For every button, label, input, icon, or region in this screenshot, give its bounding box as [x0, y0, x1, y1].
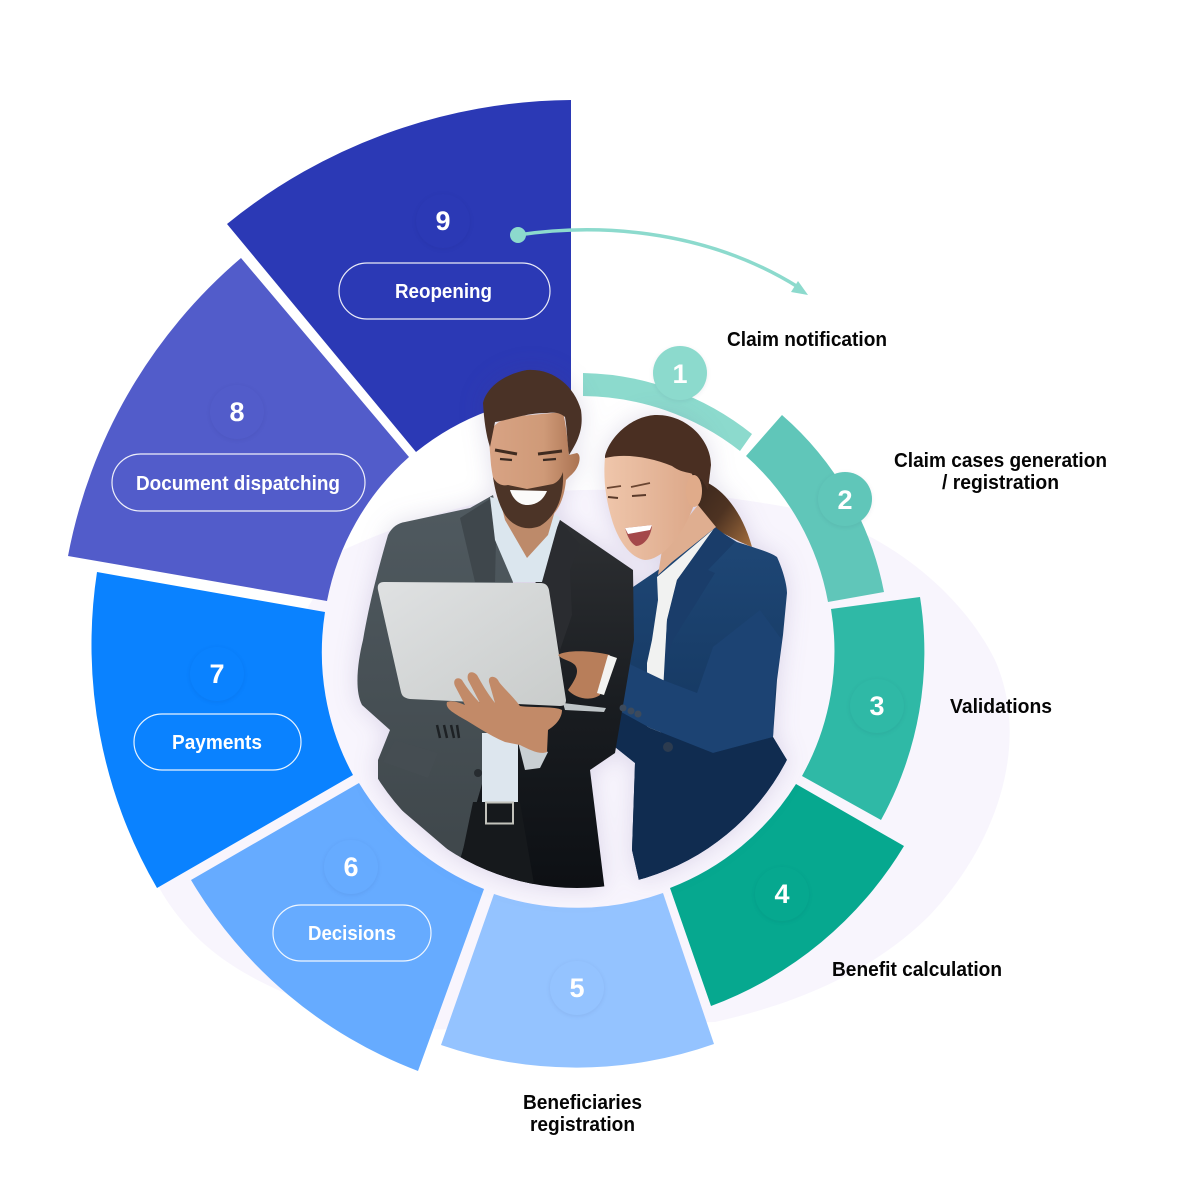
pill: Decisions	[273, 905, 431, 961]
laptop	[378, 582, 606, 712]
badge 6: 6	[343, 852, 359, 882]
badge 8: 8	[229, 397, 245, 427]
segment 7: payments	[91, 572, 353, 888]
segment 3: validations	[802, 597, 924, 820]
label: Claim cases generation / registration: / registration	[942, 472, 1059, 494]
label: Benefit calculation: Benefit calculation	[832, 959, 1002, 981]
badge 7: 7	[209, 659, 225, 689]
label: Validations: Validations	[950, 696, 1052, 718]
pill: Document dispatching	[112, 454, 365, 511]
pill: Decisions: Decisions	[308, 923, 396, 945]
label: Claim notification: Claim notification	[727, 329, 887, 351]
badge 3	[850, 679, 904, 733]
pill: Reopening	[339, 263, 550, 319]
badge 5: 5	[569, 973, 585, 1003]
badge 5	[550, 961, 604, 1015]
woman	[600, 415, 790, 900]
label: Beneficiaries registration: Beneficiaries	[523, 1092, 642, 1114]
segment 5: beneficiaries registration	[441, 893, 714, 1068]
pill: Reopening: Reopening	[395, 281, 492, 303]
background lavender blob	[150, 490, 1010, 1030]
hands	[447, 651, 673, 753]
badge 3: 3	[869, 691, 885, 721]
label: Beneficiaries registration: registration	[530, 1114, 635, 1136]
segment 8: document dispatching	[68, 258, 409, 601]
pill: Document dispatching: Document dispatching	[136, 473, 340, 495]
man: head	[483, 370, 582, 528]
segment 4: benefit calculation	[670, 784, 904, 1006]
photo: two business people with laptop	[357, 370, 790, 900]
badge 9: 9	[435, 206, 451, 236]
badge 4	[755, 867, 809, 921]
badge 8	[210, 385, 264, 439]
badge 4: 4	[774, 879, 790, 909]
badge 2: 2	[837, 485, 853, 515]
badge 7	[190, 647, 244, 701]
man: jacket and shirt	[357, 470, 634, 900]
badge 1	[653, 346, 707, 400]
segment 6: decisions	[191, 783, 484, 1071]
badge 2	[818, 472, 872, 526]
pill: Payments: Payments	[172, 732, 262, 754]
badge 1: 1	[672, 359, 688, 389]
badge 9	[416, 194, 470, 248]
label: Claim cases generation / registration	[894, 450, 1107, 494]
pill: Payments	[134, 714, 301, 770]
arrow from reopening to claim notification	[510, 227, 808, 295]
badge 6	[324, 840, 378, 894]
segment 2: claim cases generation	[746, 415, 884, 602]
segment group: process wheel	[68, 100, 924, 1071]
label: Claim cases generation / registration: Claim cases generation	[894, 450, 1107, 472]
segment 1: claim notification	[583, 373, 752, 451]
label: Beneficiaries registration	[523, 1092, 642, 1136]
segment 9: reopening	[227, 100, 571, 452]
